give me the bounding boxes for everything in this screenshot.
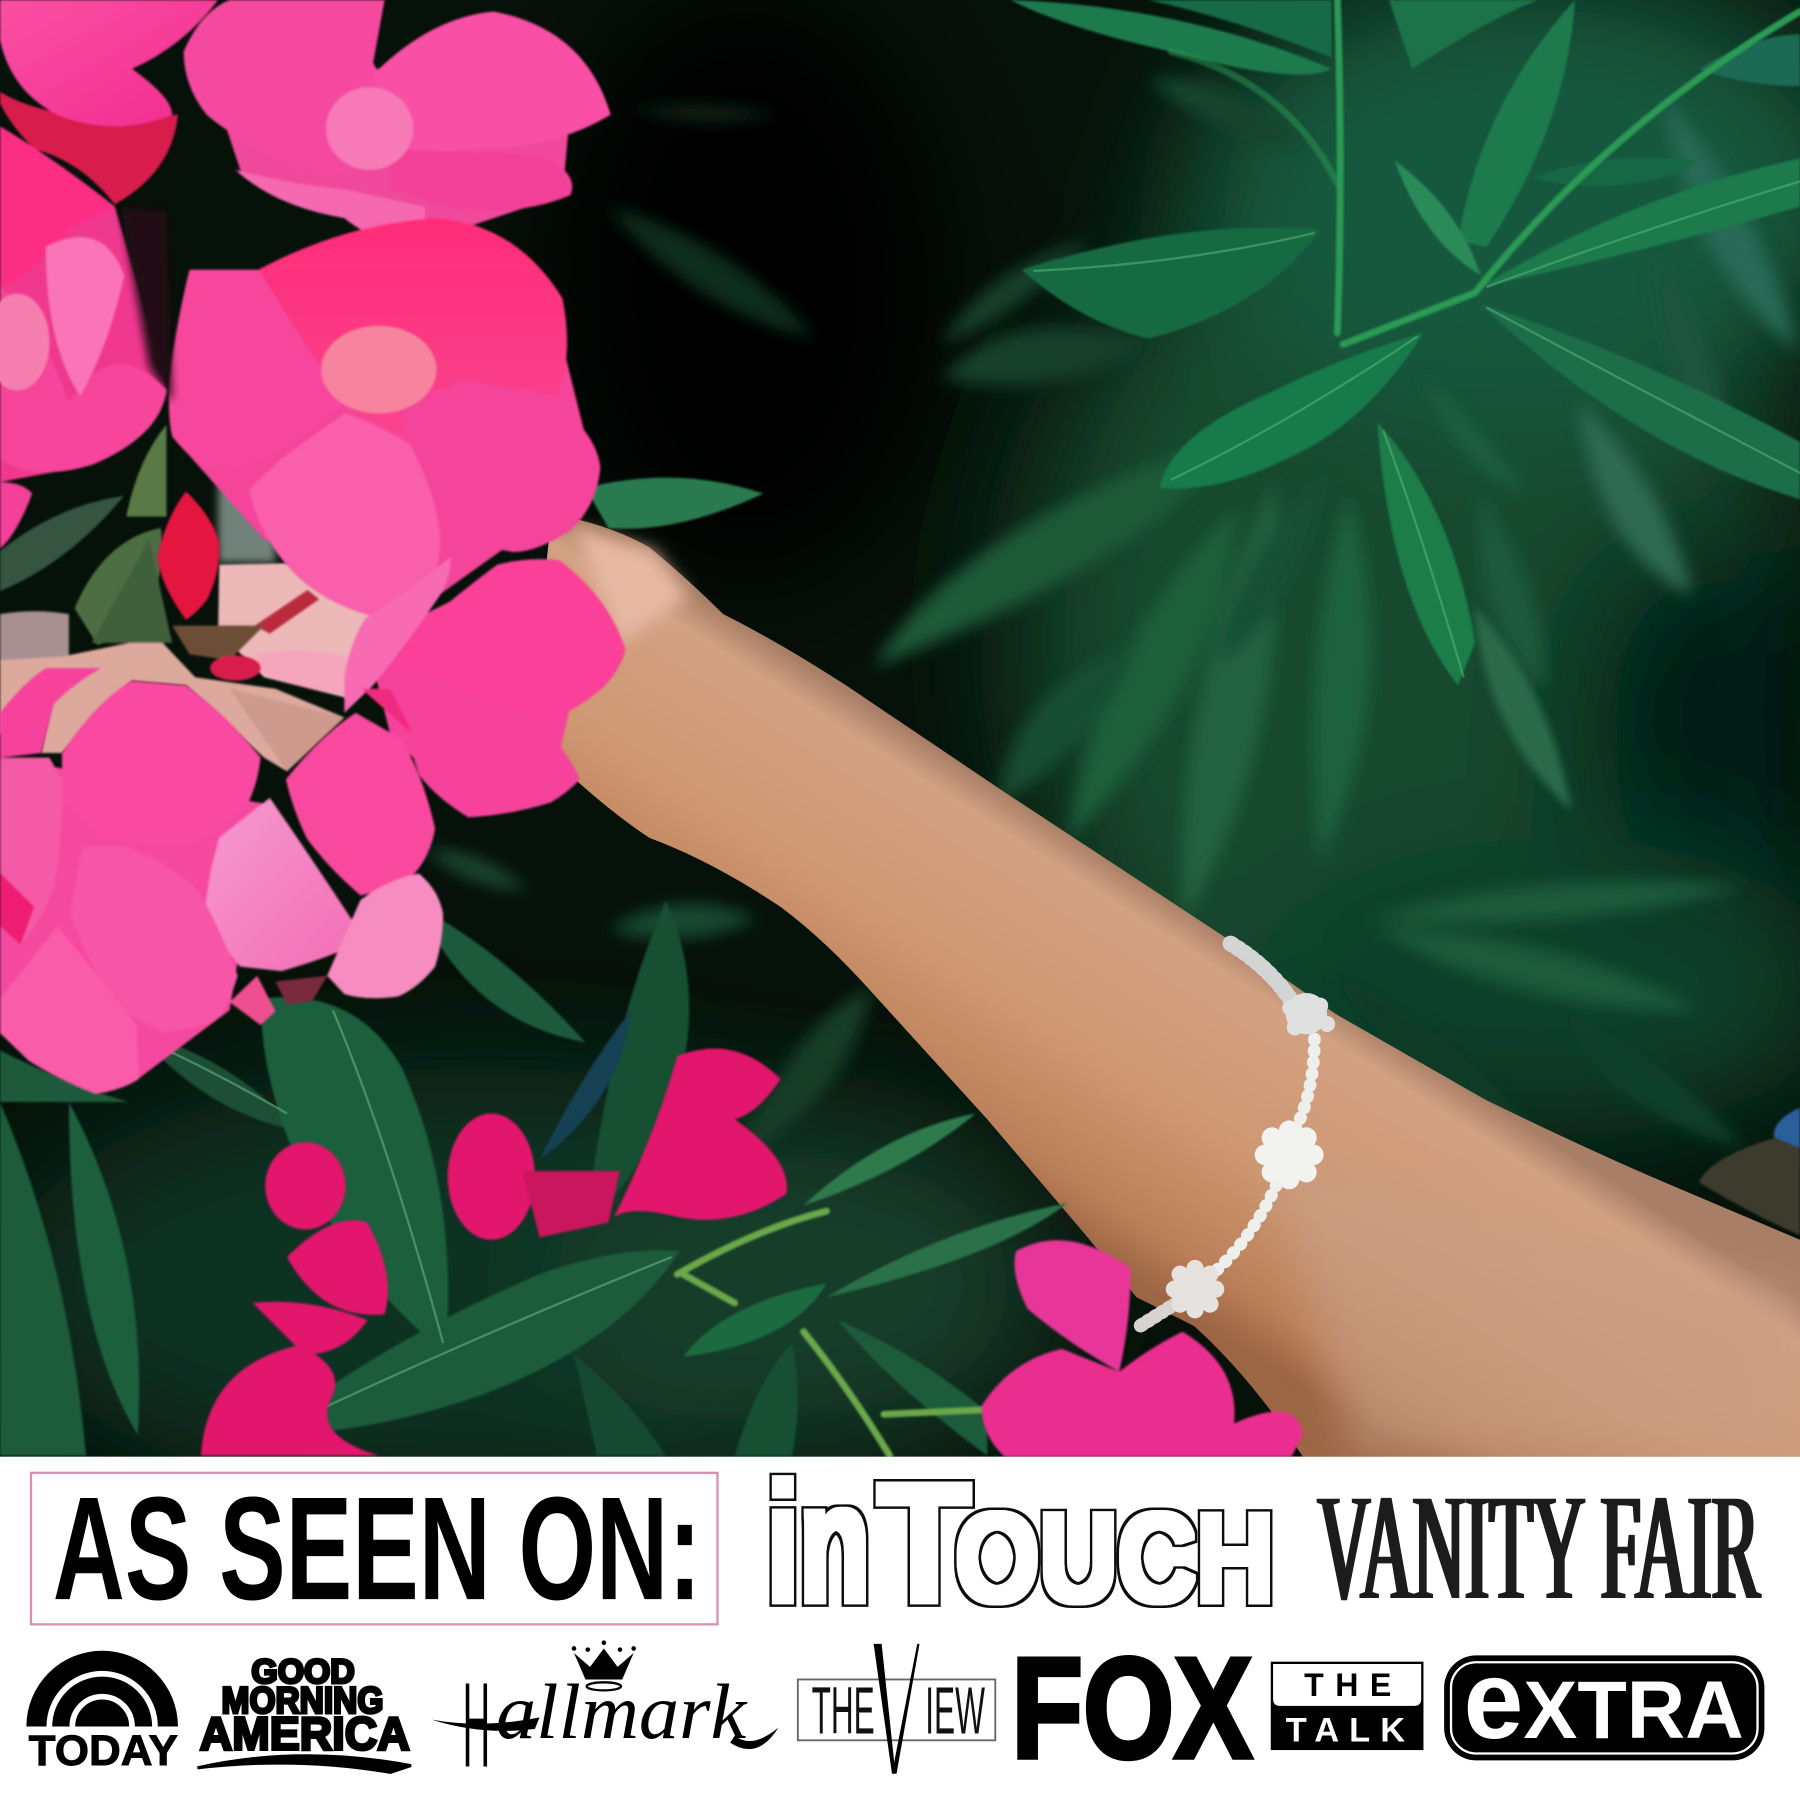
crown icon (572, 1640, 636, 1690)
stems, lower (677, 1211, 987, 1456)
logo: The View: THE (812, 1674, 875, 1748)
logo: In Touch: T (877, 1448, 971, 1638)
soft right leaf (1474, 606, 1572, 810)
white logo strip (0, 1457, 1800, 1800)
logo: Hallmark: allmark (496, 1668, 748, 1755)
foreground leaves, lower left (0, 425, 1068, 1456)
skin and pale petals behind flowers (0, 540, 379, 771)
logo: Hallmark (432, 1640, 778, 1793)
bracelet (1136, 944, 1335, 1328)
lower leaf midribs (143, 1010, 672, 1430)
as seen on box: AS SEEN ON: (53, 1467, 701, 1631)
foreground leaves, right (1010, 0, 1800, 685)
logo: The Talk: TALK (1286, 1711, 1405, 1749)
flower bud (157, 491, 219, 620)
logo: The Talk: THE (1304, 1667, 1391, 1703)
arm highlight lower right (1263, 1148, 1800, 1457)
leaf midribs (1033, 181, 1800, 677)
arm (528, 520, 1800, 1457)
logo: Hallmark: H (463, 1658, 490, 1793)
logo: In Touch: in (767, 1448, 870, 1638)
logo: Good Morning America: MORNING (222, 1680, 383, 1721)
flower: centre lower (286, 557, 626, 895)
logo: Today: TODAY (29, 1727, 178, 1774)
wrist highlight (574, 528, 689, 643)
logo: Good Morning America: GOOD (251, 1653, 355, 1691)
logo: The Talk (1271, 1662, 1423, 1750)
logo: The View (798, 1644, 995, 1774)
logo: Good Morning America: AMERICA (200, 1707, 410, 1759)
stems, right (1171, 0, 1800, 344)
logo: In Touch (767, 1448, 1274, 1638)
logo: Extra: e (1464, 1637, 1523, 1762)
blurred background leaves (425, 79, 1797, 1159)
logo: In Touch: OUCH (955, 1487, 1274, 1628)
bracelet chain (1136, 944, 1314, 1328)
logo: Fox: FOX (1011, 1629, 1252, 1789)
bracelet flower: top (1282, 993, 1335, 1035)
small bud (210, 655, 261, 681)
sepals (255, 590, 319, 634)
logo: Extra (1444, 1637, 1764, 1762)
sleeve pattern at right edge (1699, 1108, 1800, 1235)
as seen on box (31, 1467, 717, 1631)
logo: The View: IEW (925, 1674, 985, 1748)
bracelet flower: lower (1166, 1260, 1224, 1318)
bracelet flower: middle (1255, 1120, 1324, 1189)
flower: left edge (0, 126, 172, 549)
flowers: main pink clusters (0, 0, 626, 1094)
logo: Good Morning America (197, 1653, 411, 1772)
flower: near bracelet (982, 1240, 1303, 1457)
flowers: lower magenta (201, 1048, 787, 1456)
flower: top left (0, 0, 218, 204)
logo: Today (26, 1651, 178, 1774)
logo: Extra: XTRA (1523, 1665, 1744, 1756)
flower: top centre (184, 0, 611, 244)
flower: centre large (169, 218, 600, 616)
flower: bottom left (0, 668, 443, 1094)
